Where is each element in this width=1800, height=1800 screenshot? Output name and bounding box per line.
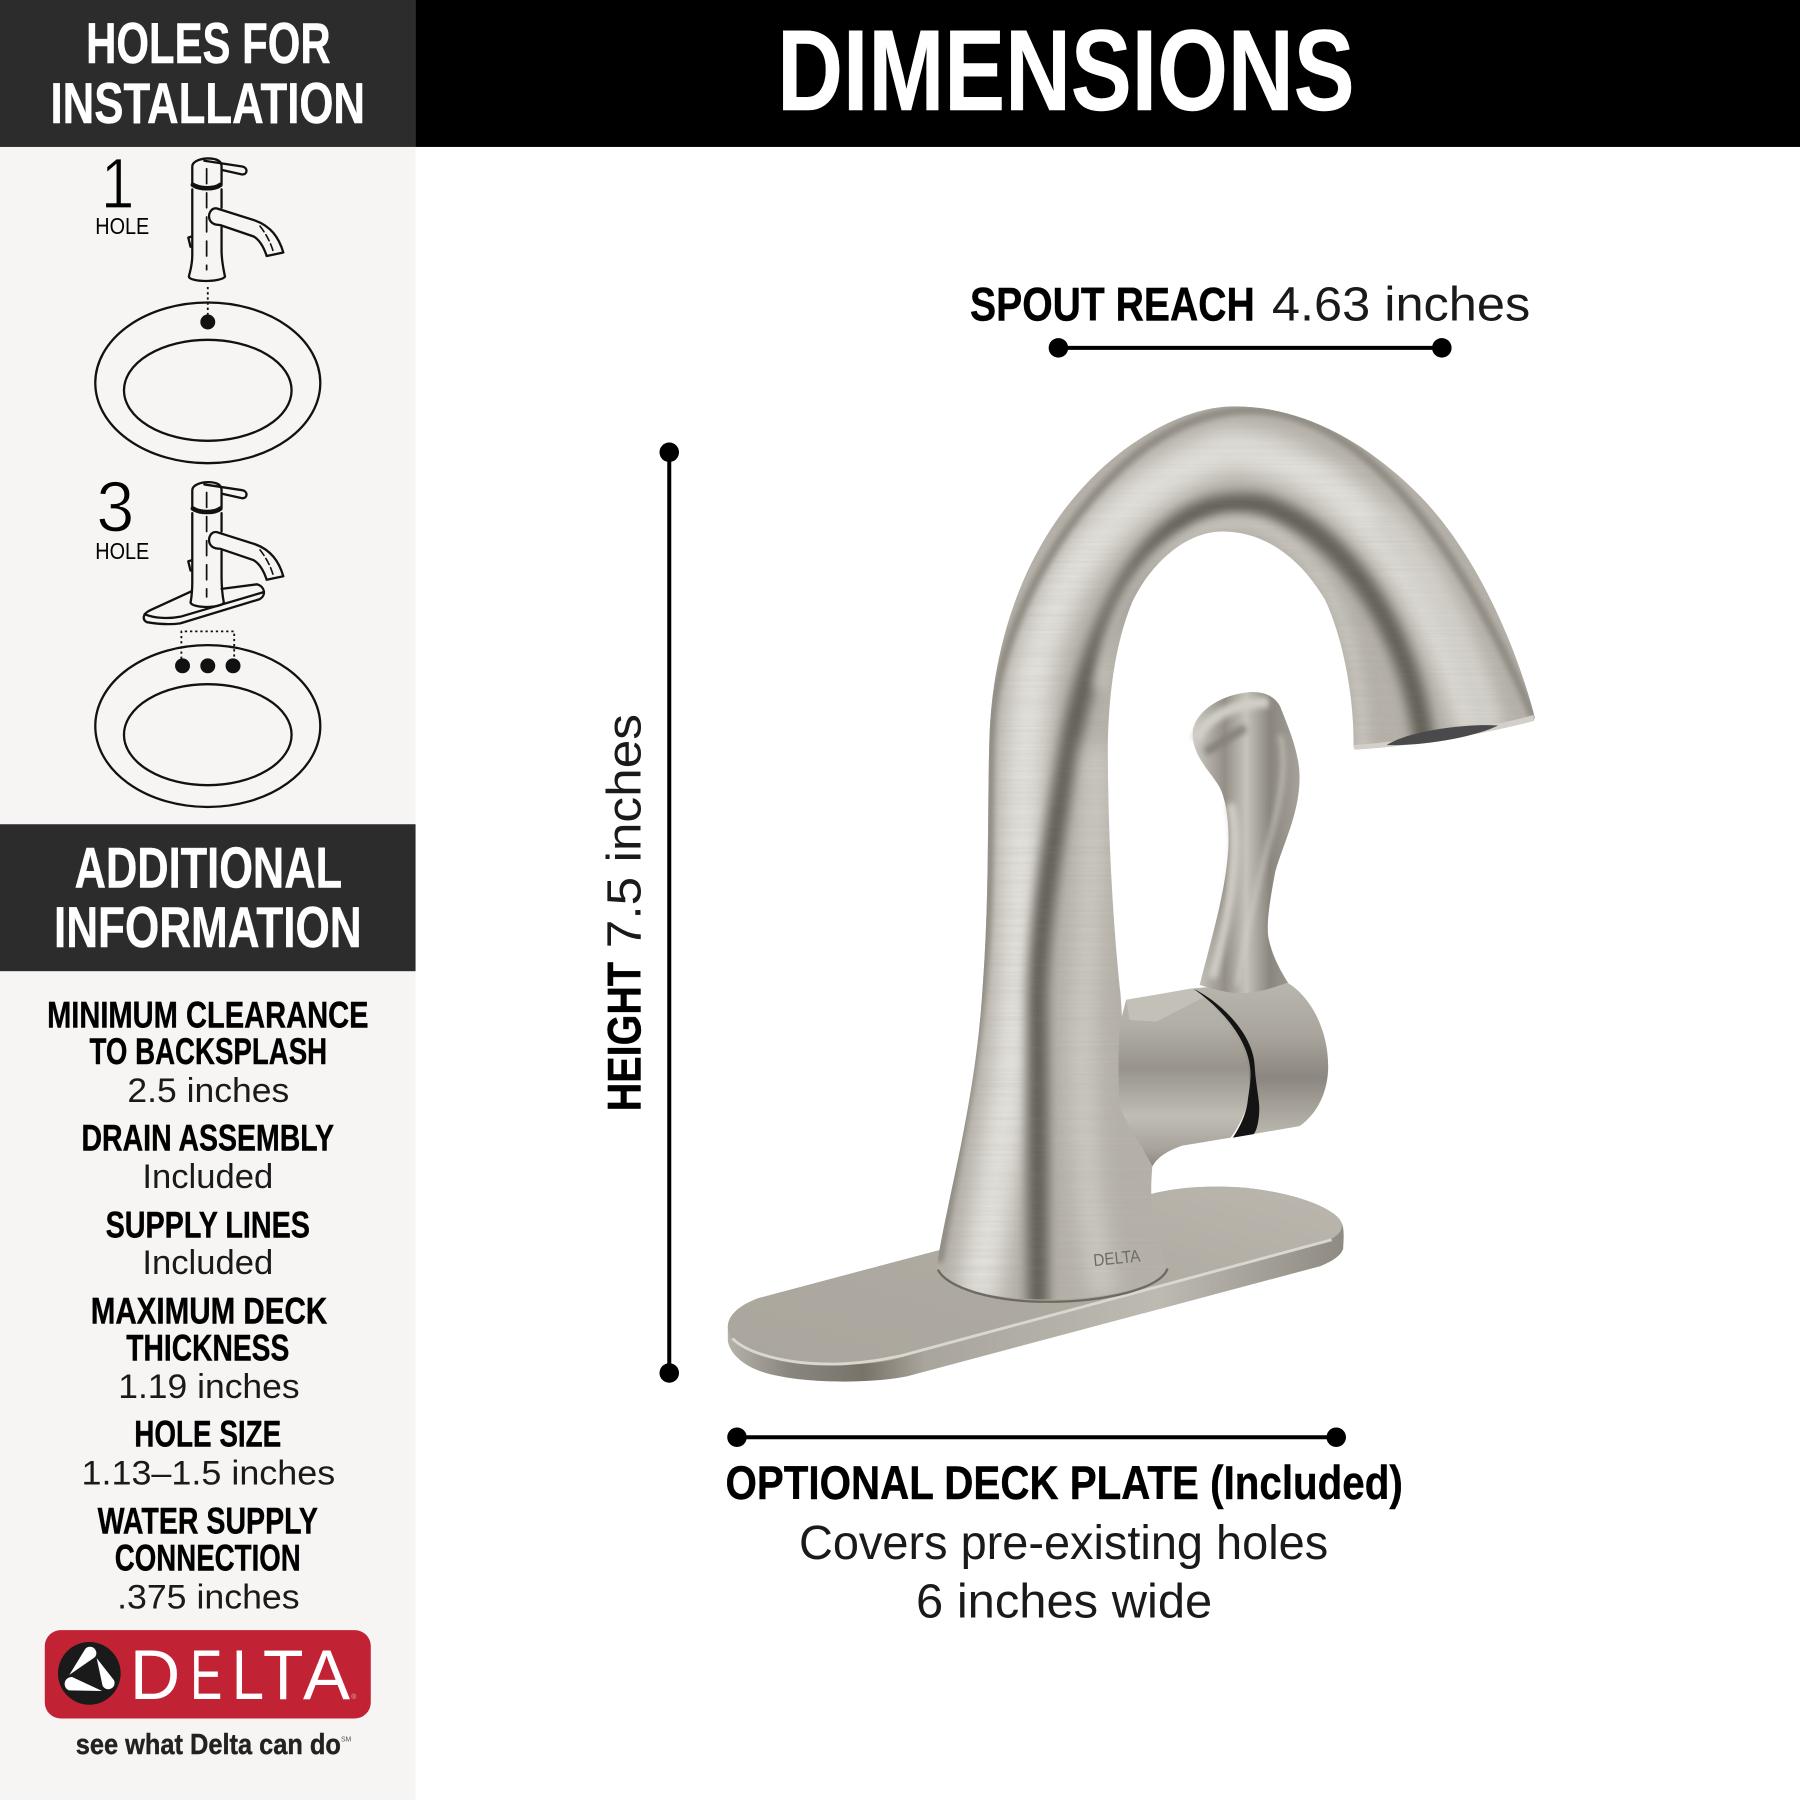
panel: left sidebar [0, 0, 416, 1800]
icon: sink with three holes [95, 631, 320, 807]
dimension: height [598, 443, 679, 1383]
title: DIMENSIONS [777, 7, 1355, 135]
deck plate [728, 1187, 1344, 1382]
spec: water supply connection: WATER SUPPLY [98, 1501, 318, 1542]
heading: holes for installation: HOLES FOR [86, 12, 331, 76]
label: 1 hole: HOLE [95, 213, 149, 239]
icon: one hole installation [95, 145, 320, 463]
spec: minimum clearance: MINIMUM CLEARANCE [47, 994, 368, 1035]
spec: supply lines: Included [142, 1244, 273, 1282]
logo: delta: A [303, 1635, 350, 1714]
text block: additional information specs [47, 994, 368, 1616]
logo: delta: D [130, 1635, 180, 1714]
spec: maximum deck thickness: 1.19 inches [118, 1368, 300, 1406]
logo: delta: E [190, 1635, 222, 1714]
title banner: dimensions [416, 0, 1800, 147]
spec: hole size [82, 1413, 335, 1492]
icon: three hole installation [95, 469, 320, 807]
label: 1 hole [95, 145, 149, 239]
dimension: spout reach: SPOUT REACH [970, 277, 1255, 330]
spec: minimum clearance: 2.5 inches [127, 1072, 289, 1110]
logo: delta: L [232, 1635, 264, 1714]
icon: faucet with deck plate [144, 482, 283, 624]
spec: water supply connection: CONNECTION [115, 1537, 301, 1578]
heading: holes for installation: INSTALLATION [51, 72, 365, 136]
engraved logo: DELTA: DELTA [1092, 1245, 1142, 1270]
label: 3 hole [95, 469, 149, 564]
side handle cylinder [1119, 980, 1328, 1166]
spec: minimum clearance: TO BACKSPLASH [90, 1031, 327, 1072]
dimension: height: 7.5 inches [598, 714, 652, 948]
spec: supply lines [106, 1204, 310, 1282]
logo: delta: T [263, 1635, 304, 1714]
tagline: SM [341, 1736, 352, 1743]
logo: delta [45, 1630, 371, 1718]
spec: drain assembly: Included [142, 1158, 273, 1196]
spec: hole size: 1.13–1.5 inches [82, 1454, 335, 1492]
label: 3 hole: HOLE [95, 538, 149, 564]
dimension: spout reach [970, 277, 1530, 358]
label: 3 hole: 3 [96, 469, 134, 548]
spec: maximum deck thickness: MAXIMUM DECK [91, 1291, 328, 1332]
heading: additional information: INFORMATION [54, 896, 362, 960]
spec: water supply connection [98, 1501, 318, 1616]
spec: maximum deck thickness: THICKNESS [126, 1327, 289, 1368]
spec: supply lines: SUPPLY LINES [106, 1204, 310, 1245]
dimension: height: HEIGHT [598, 962, 651, 1111]
dimension: optional deck plate [726, 1427, 1403, 1628]
dimension: spout reach: 4.63 inches [1272, 277, 1530, 331]
spec: drain assembly [82, 1117, 334, 1196]
spec: minimum clearance [47, 994, 368, 1110]
lever handle [1193, 692, 1300, 993]
spec: hole size: HOLE SIZE [134, 1413, 281, 1454]
faucet body and spout [918, 390, 1561, 1309]
label: 1 hole: 1 [101, 145, 134, 224]
heading: additional information: ADDITIONAL [75, 836, 342, 900]
logo: delta: ® [351, 1693, 356, 1701]
spec: maximum deck thickness [91, 1291, 328, 1406]
illustration: faucet [728, 390, 1561, 1382]
heading: holes for installation [0, 0, 416, 147]
nozzle aerator [1353, 715, 1534, 750]
dimension: optional deck plate: 6 inches wide [916, 1574, 1212, 1628]
dimension: optional deck plate: OPTIONAL DECK PLATE (Included) [726, 1456, 1403, 1509]
icon: sink with one hole [95, 287, 320, 463]
icon: single hole faucet [188, 158, 283, 281]
spec: water supply connection: .375 inches [117, 1578, 300, 1616]
tagline: see what Delta can do [76, 1729, 341, 1761]
dimension: optional deck plate: Covers pre-existing holes [799, 1516, 1328, 1570]
spec: drain assembly: DRAIN ASSEMBLY [82, 1117, 334, 1158]
heading: additional information [0, 824, 416, 971]
